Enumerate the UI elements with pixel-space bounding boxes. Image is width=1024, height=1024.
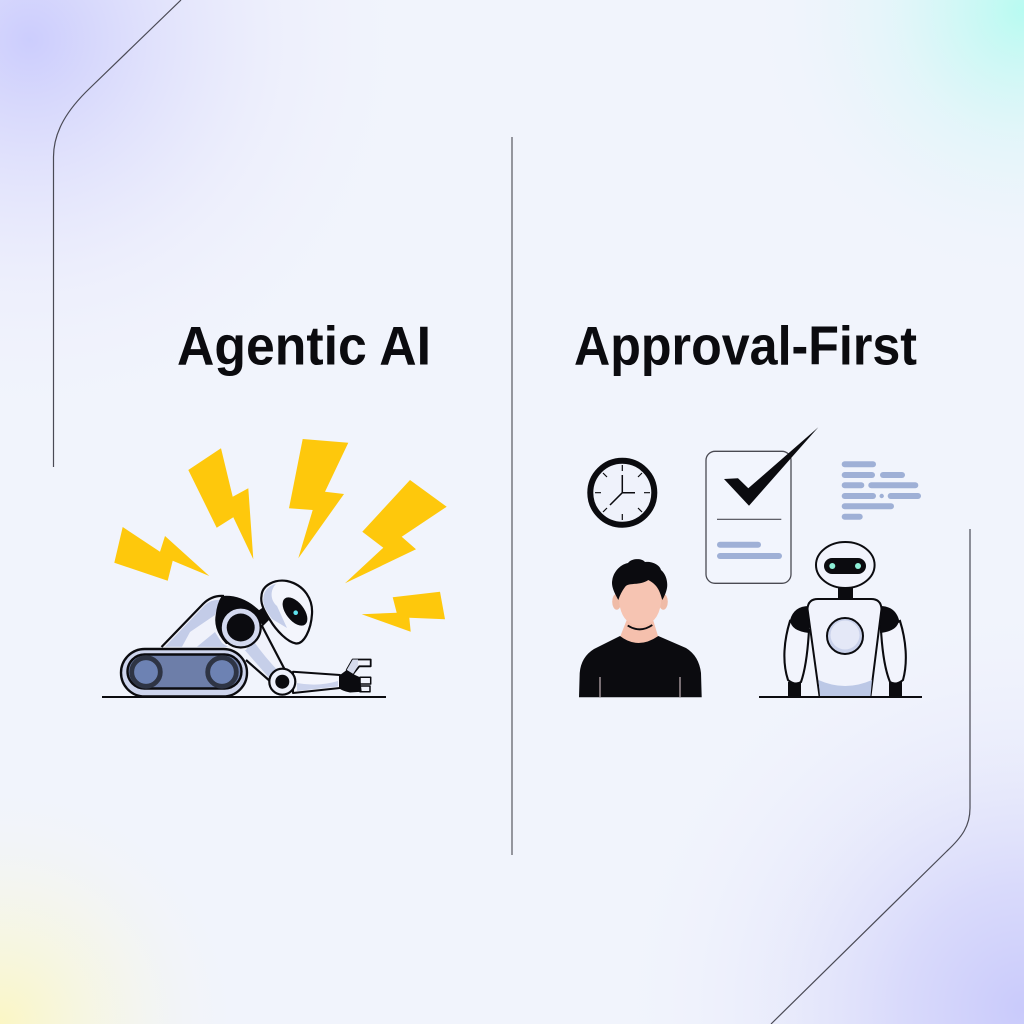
icon: approval document [706, 427, 818, 583]
head [261, 581, 312, 644]
forearm [293, 672, 340, 693]
shoulder black crescent [215, 596, 261, 644]
elbow [269, 669, 295, 695]
tread [121, 649, 247, 696]
heading: Agentic AI: Agentic AI [177, 314, 431, 376]
icon: fallen robot [121, 581, 371, 696]
lower arm strut [238, 625, 290, 684]
ground line left [102, 696, 386, 698]
icon: lightning bolts [114, 439, 447, 632]
neck [255, 606, 272, 626]
panel: agentic AI illustration [102, 439, 447, 697]
icon: text lines [842, 461, 921, 520]
upper arm [162, 596, 262, 650]
icon: clock [590, 461, 654, 525]
hand [339, 660, 371, 692]
ground line right [759, 696, 922, 698]
icon: person [579, 559, 702, 697]
icon: upright robot [784, 542, 906, 696]
panel: approval-first illustration [579, 427, 922, 697]
shoulder joint [221, 608, 261, 648]
heading: Approval-First: Approval-First [574, 314, 917, 376]
